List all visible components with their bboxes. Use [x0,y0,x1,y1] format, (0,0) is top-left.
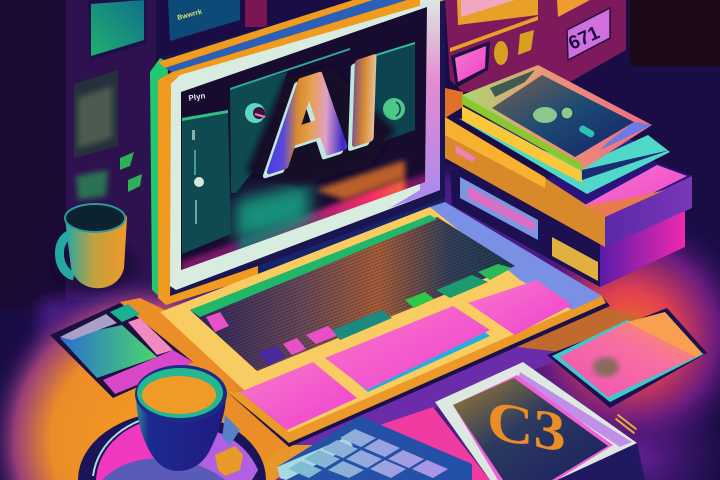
AI heading: AI [266,30,382,197]
mug handle [59,234,74,276]
cup body [136,393,226,471]
screen glow [181,160,430,280]
phone on top [462,65,652,171]
sign card: 671 [565,22,603,55]
orange book [445,117,692,247]
photo card right [547,308,707,408]
green marks [76,152,142,200]
calculator keys [288,429,448,478]
screen bezel [170,0,440,290]
tablet bottom right with C3 [435,362,645,480]
tablet screen [60,325,157,378]
phone icon [533,107,595,138]
blue note: Bwwrrk [177,9,203,22]
pink card [451,41,490,88]
dark shape behind letters [246,66,395,185]
coffee cup and saucer [78,365,266,480]
second panel [230,48,350,193]
wall shelf with cards [445,0,626,118]
small yellow clip [615,414,637,434]
trackpad left [240,362,357,430]
green card [88,0,146,60]
cup rim [135,365,227,423]
sign card [565,8,610,60]
teal book [458,118,670,194]
sugar cube [215,446,243,476]
C3 numeral: C3 [487,389,566,465]
book stack [445,65,692,287]
monitor body [150,0,445,302]
buttons on screen [245,98,405,123]
trackpad right [468,280,572,335]
tablet footer bar [103,350,193,394]
coffee [142,376,216,414]
mug opening [65,204,125,232]
pink desk mat [380,407,490,480]
screen [181,7,427,270]
blue note [168,0,240,41]
tablet screen [453,375,613,480]
mug body [65,209,127,288]
coffee mug on the left [53,204,137,290]
screen heading: Plyn [188,91,206,103]
yellow spine [462,106,582,183]
function keys [206,264,512,366]
phone speaker [490,70,535,97]
monitor [150,0,445,305]
lower dark box [450,170,685,287]
phone screen [492,75,634,157]
keyboard [190,215,515,371]
trackpad centre [325,306,490,392]
AI heading: AI [262,34,378,201]
tablet pink sidebar [128,318,173,355]
calculator keyboard [277,416,472,480]
photo panel [74,70,118,158]
right panel [373,42,415,145]
tablet on the left [50,303,193,398]
tablet frame [435,362,637,480]
laptop base [160,202,610,447]
gold tags [494,30,534,65]
saucer [78,412,266,480]
wall notes left [74,0,267,200]
green top strip [190,215,437,317]
left sidebar panel [182,110,231,254]
